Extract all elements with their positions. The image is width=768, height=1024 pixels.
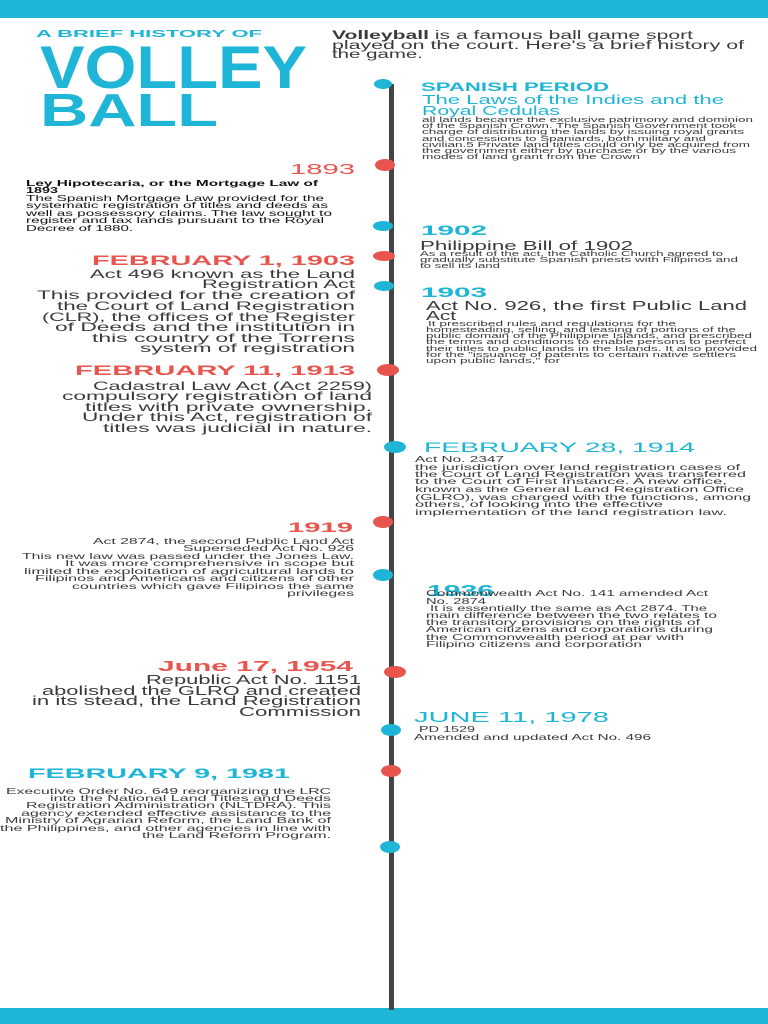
event: February 11, 1913: FEBRUARY 11, 1913 [75,362,355,378]
event: February 28, 1914: the jurisdiction over land registration cases of [415,462,741,472]
intro text: played on the court. Here's a brief history of [332,40,745,52]
event: Spanish period: The Laws of the Indies and the [422,92,724,107]
event: Spanish period: modes of land grant from the Crown [422,154,640,161]
event: 1893: Ley Hipotecaria, or the Mortgage Law of [26,178,318,188]
event: Spanish period: SPANISH PERIOD [421,80,610,94]
event: June 17, 1954: Commission [239,705,361,719]
event: 1903: for the "issuance of patents to certain native settlers [426,352,737,359]
event: June 17, 1954: in its stead, the Land Registration [32,694,361,708]
title [36,29,307,136]
event: February 28, 1914: implementation of the land registration law. [415,507,727,517]
event: February 28, 1914: to the Court of First Instance. A new office, [415,476,727,486]
event: 1902: gradually substitute Spanish priests with Filipinos and [420,257,738,264]
event: Spanish period: Royal Cedulas [422,103,561,118]
event: February 9, 1981: into the National Land Titles and Deeds [50,793,331,803]
event: February 1, 1903: Act 496 known as the Land [90,267,355,281]
event: February 1, 1903: system of registration [140,341,355,355]
event: February 1, 1903: this country of the Torrens [92,331,355,345]
event: 1903: Act [426,308,457,323]
title: BALL [40,84,218,136]
event: 1936 [426,583,717,649]
event: 1893: Decree of 1880. [26,223,133,233]
event: Spanish period: civilian.5 Private land titles could only be acquired from [422,142,750,149]
event: 1919: Superseded Act No. 926 [183,543,354,553]
event: 1893: register and tax lands pursuant to the Royal [26,215,324,225]
event: February 28, 1914: the Court of Land Registration was transferred [415,469,747,479]
event: Spanish period: charge of distributing the lands by issuing royal grants [422,129,745,136]
event: February 9, 1981: Executive Order No. 649 reorganizing the LRC [6,786,331,796]
event: June 17, 1954 [32,658,361,719]
event: February 11, 1913: compulsory registration of land [62,389,372,403]
event: Spanish period: the government either by purchase or by the various [422,148,737,155]
event: June 11, 1978: JUNE 11, 1978 [414,709,609,726]
event: 1903: their titles to public lands in the Islands. It also provided [426,346,757,353]
event: February 9, 1981 [0,765,332,840]
event: February 1, 1903: FEBRUARY 1, 1903 [92,252,355,268]
event: February 28, 1914 [415,439,751,517]
event: June 17, 1954: Republic Act No. 1151 [146,673,361,687]
event: February 9, 1981: agency extended effective assistance to the [21,808,331,818]
event: 1919: Filipinos and Americans and citizens of other [35,573,354,583]
event: 1903: homesteading, selling, and leasing of portions of the [426,327,736,334]
event: February 9, 1981: FEBRUARY 9, 1981 [28,765,290,781]
event: Spanish period: and concessions to Spaniards, both military and [422,136,706,143]
event: June 11, 1978 [414,709,651,742]
event: 1893: systematic registration of titles and deeds as [26,200,328,210]
timeline dots [373,79,406,853]
bottom bar [0,1008,768,1024]
timeline line [389,84,394,1010]
event: 1919: countries which gave Filipinos the same [72,581,354,591]
event: February 11, 1913 [62,362,373,435]
event: 1936: Filipino citizens and corporation [426,639,642,649]
event: February 11, 1913: titles was judicial in nature. [103,421,372,435]
event: Spanish period: all lands became the exclusive patrimony and dominion [422,117,753,124]
event: 1936: the Commonwealth period at par with [426,632,684,642]
event: June 11, 1978: Amended and updated Act No. 496 [414,732,651,742]
event: 1919: privileges [287,588,354,598]
title: A BRIEF HISTORY OF [36,29,262,40]
event: 1902: As a result of the act, the Catholic Church agreed to [420,251,723,258]
event: 1919: 1919 [288,519,353,535]
event: 1903: the terms and conditions to enable persons to perfect [426,339,746,346]
event: June 17, 1954: abolished the GLRO and created [42,684,361,698]
event: 1903: 1903 [421,284,487,300]
event: February 11, 1913: titles with private ownership. [85,400,372,414]
event: 1936: American citizens and corporations during [426,624,713,634]
event: February 28, 1914: others, of looking into the effective [415,499,664,509]
event: 1893: 1893 [290,161,355,178]
event: 1903: upon public lands," for [426,358,561,365]
event: February 1, 1903: the Court of Land Registration [57,299,355,313]
event: 1902: 1902 [421,222,487,238]
event: February 9, 1981: Ministry of Agrarian Reform, the Land Bank of [5,815,332,825]
event: 1903: public domain of the Philippine Islands, and prescribed [426,333,752,340]
event: 1919: Act 2874, the second Public Land Act [93,536,355,546]
event: 1903 [421,284,757,365]
event: 1936: Commonwealth Act No. 141 amended Act [426,588,709,598]
event: June 17, 1954: June 17, 1954 [158,658,354,675]
event: 1902 [420,222,738,270]
event: February 9, 1981: the Land Reform Program. [142,830,331,840]
event: 1893: well as possessory claims. The law sought to [24,208,332,218]
event: February 28, 1914: Act No. 2347 [415,454,504,464]
event: February 1, 1903 [37,252,356,355]
event: 1903: Act No. 926, the first Public Land [426,298,747,313]
event: February 28, 1914: known as the General Land Registration Office [415,484,744,494]
event: 1893: The Spanish Mortgage Law provided for the [26,193,324,203]
title: VOLLEY [40,34,307,101]
event: February 1, 1903: This provided for the creation of [37,288,356,302]
event: 1919 [22,519,355,598]
event: 1919: It was more comprehensive in scope but [65,558,355,568]
event: 1902: to sell its land [420,263,500,270]
event: June 11, 1978: PD 1529 [419,724,475,734]
intro text [332,30,745,61]
event: 1936: main difference between the two relates to [426,610,717,620]
event: February 11, 1913: Under this Act, registration of [82,410,373,424]
event: February 11, 1913: Cadastral Law Act (Act 2259) [93,379,372,393]
event: Spanish period [421,80,753,161]
intro text: Volleyball is a famous ball game sport [332,30,694,42]
event: 1936: No. 2874 [426,596,486,606]
event: February 28, 1914: (GLRO), was charged with the functions, among [415,492,751,502]
event: February 1, 1903: (CLR), the offices of the Register [42,310,355,324]
event: 1936: 1936 [427,583,494,600]
event: 1893: 1893 [26,185,58,195]
event: February 9, 1981: Registration Administration (NLTDRA). This [26,800,331,810]
event: 1893 [24,161,355,233]
event: Spanish period: of the Spanish Crown. The Spanish Government took [422,123,737,130]
event: February 9, 1981: the Philippines, and other agencies in line with [0,823,331,833]
top bar [0,0,768,18]
event: 1902: Philippine Bill of 1902 [420,238,633,253]
event: 1936: It is essentially the same as Act 2874. The [430,603,707,613]
event: 1919: limited the exploitation of agricultural lands to [24,566,355,576]
event: 1903: It prescribed rules and regulations for the [428,321,676,328]
event: February 28, 1914: FEBRUARY 28, 1914 [424,439,695,455]
event: February 1, 1903: of Deeds and the institution in [55,320,355,334]
event: 1936: the transitory provisions on the rights of [426,617,701,627]
event: 1919: This new law was passed under the Jones Law. [22,551,354,561]
event: February 1, 1903: Registration Act [202,277,356,291]
intro text: the game. [332,49,423,61]
